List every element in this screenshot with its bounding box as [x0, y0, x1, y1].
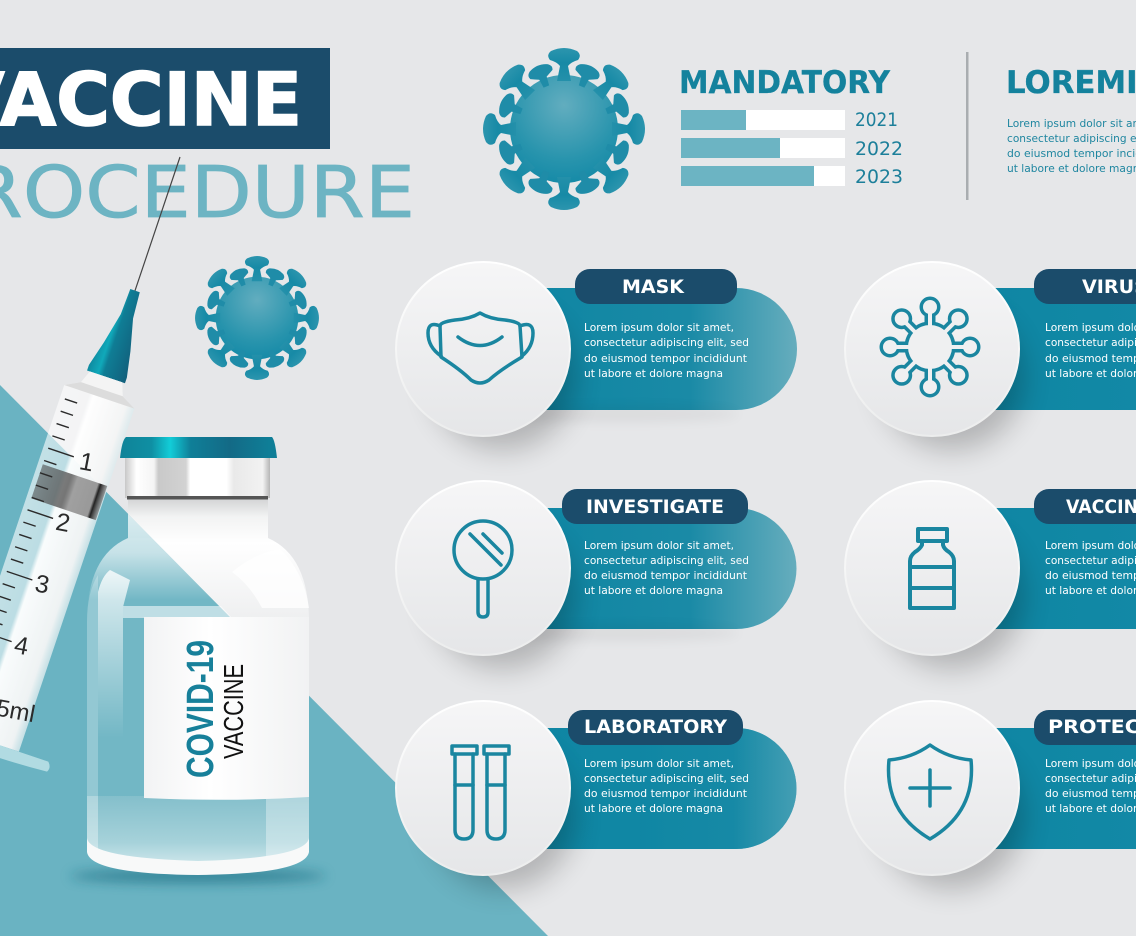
graduation numbers: 3 [33, 569, 52, 600]
card circle [845, 701, 1019, 875]
plunger [31, 464, 107, 520]
card circle [396, 262, 570, 436]
card tag [575, 269, 737, 304]
label: VACCINE [218, 664, 249, 759]
card tag [1034, 710, 1136, 745]
card text: Lorem ipsum dolor sit amet, [584, 540, 734, 552]
lorem ipsum header block [1006, 65, 1136, 175]
card text: ut labore et dolore magna [584, 803, 723, 815]
card: vaccine [845, 481, 1136, 669]
card circle [396, 481, 570, 655]
card circle [845, 481, 1019, 655]
card body [980, 288, 1136, 410]
bar 2023 [681, 166, 903, 188]
large virus icon [483, 48, 645, 210]
card circle [845, 262, 1019, 436]
card tag [1034, 489, 1136, 524]
card heading: MASK [622, 276, 685, 298]
liquid [87, 796, 309, 862]
card text [1045, 758, 1136, 815]
bar 2021: 2021 [855, 109, 898, 131]
teal diagonal background shape [0, 385, 548, 936]
needle [134, 157, 181, 292]
card body [530, 288, 797, 410]
graduation numbers [0, 444, 123, 733]
card tag [1034, 269, 1136, 304]
right shoulder highlight [232, 549, 309, 608]
foot [87, 838, 309, 875]
left vertical highlight [98, 570, 130, 738]
graduation numbers: 1 [77, 447, 96, 477]
card text [1045, 540, 1136, 597]
header paragraph [1007, 118, 1136, 175]
bar 2022 [681, 138, 903, 160]
icon: mask [428, 313, 533, 383]
card circle [396, 701, 570, 875]
icon: shield [889, 745, 971, 839]
card text: consectetur adipiscing elit, sed [584, 773, 749, 785]
icon: virus outline [883, 300, 977, 394]
card: investigate [396, 481, 796, 669]
card text [584, 540, 749, 597]
card: protect [845, 701, 1136, 889]
card body [530, 728, 796, 849]
card: laboratory [396, 701, 796, 889]
horizontal highlight [123, 606, 232, 618]
card text: do eiusmod tempor incididunt [584, 570, 747, 582]
icon: bottle [910, 529, 954, 608]
card tag [568, 710, 743, 745]
glass body [87, 538, 309, 862]
bar 2022: 2022 [855, 138, 903, 160]
card heading: LABORATORY [584, 716, 727, 738]
graduation numbers: 2 [54, 508, 72, 538]
card text: Lorem ipsum dolor sit amet, [584, 758, 734, 770]
card text [584, 322, 749, 380]
card body [530, 508, 796, 629]
graduation numbers: 4 [12, 631, 31, 661]
floor shadow under vial [70, 869, 326, 883]
card text: Lorem ipsum dolor sit amet, [584, 322, 734, 334]
syringe [0, 134, 247, 774]
card text [1045, 322, 1136, 380]
card: mask [396, 262, 797, 450]
card text: consectetur adipiscing elit, sed [584, 555, 749, 567]
card text: do eiusmod tempor incididunt [584, 788, 747, 800]
label [144, 617, 309, 800]
card text: consectetur adipiscing elit, sed [584, 337, 749, 349]
card heading: INVESTIGATE [586, 496, 724, 518]
icon: magnifier [454, 521, 512, 617]
bar 2021 [681, 109, 898, 131]
flange [0, 717, 51, 774]
small virus icon [195, 256, 319, 380]
icon: test tubes [452, 746, 509, 839]
graduation ticks [0, 399, 90, 691]
card tag [562, 489, 748, 524]
barrel [0, 354, 173, 774]
vaccine vial [87, 437, 309, 875]
card text: do eiusmod tempor incididunt [584, 353, 747, 365]
needle hub [87, 284, 154, 383]
bar 2023: 2023 [855, 166, 903, 188]
card text: ut labore et dolore magna [584, 585, 723, 597]
chart heading: MANDATORY [679, 65, 891, 101]
card text [584, 758, 749, 815]
left shoulder glass [87, 514, 230, 622]
card body [980, 728, 1136, 849]
neck and right shoulder [128, 497, 309, 696]
crimped silver collar [125, 458, 270, 498]
label: COVID-19 [180, 640, 222, 778]
teal flip cap [120, 437, 277, 458]
bar chart: mandatory [679, 65, 903, 188]
card body [980, 508, 1136, 629]
left glass edge [87, 575, 98, 843]
card text: ut labore et dolore magna [584, 368, 723, 380]
card: virus [845, 262, 1136, 450]
